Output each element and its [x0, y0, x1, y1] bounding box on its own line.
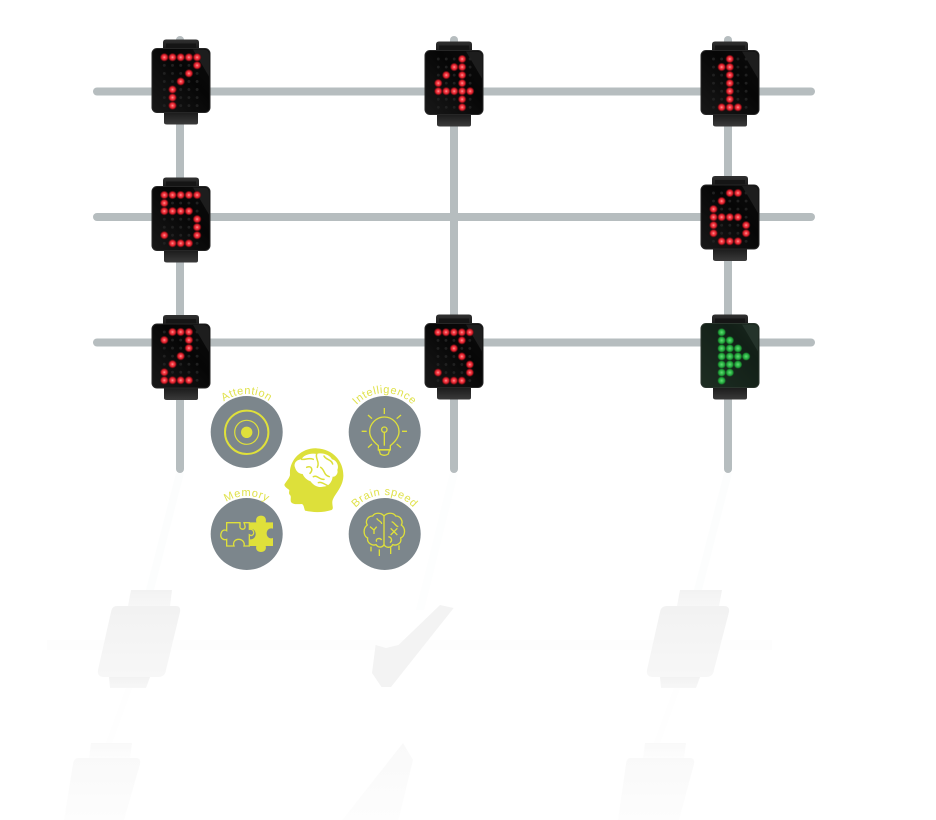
reflection: right upper watch [647, 590, 729, 688]
icon: puzzle pieces [221, 516, 273, 552]
light unit: green arrow [701, 314, 759, 400]
light unit: digit 1 [701, 42, 759, 126]
badge: Memory: Memory [224, 490, 270, 502]
icon: head with brain [284, 448, 343, 512]
reflection: left lower watch [64, 743, 140, 820]
cluster of cognitive skills [210, 385, 421, 570]
reflection: middle upper watch fragment [372, 605, 454, 687]
light unit: digit 6 [701, 176, 759, 261]
light unit: digit 3 [425, 314, 483, 400]
badge: Memory [210, 490, 283, 570]
reflection: middle lower watch fragment [342, 743, 413, 820]
icon: target [225, 411, 268, 454]
light unit: digit 7 [152, 40, 210, 124]
reflection: right lower watch [618, 743, 694, 820]
badge: Attention: Attention [222, 387, 271, 402]
light unit: digit 4 [425, 42, 483, 126]
light unit: digit 2 [152, 315, 210, 400]
reflection: left upper watch [98, 590, 180, 688]
icon: brain outline [364, 513, 405, 556]
light unit: digit 5 [152, 178, 210, 262]
icon: light bulb [362, 408, 407, 455]
badge: Brain speed [348, 489, 421, 570]
grid of grey poles [97, 40, 811, 469]
badge: Intelligence [348, 385, 421, 468]
badge: Intelligence: Intelligence [352, 385, 415, 404]
badge: Brain speed: Brain speed [351, 489, 418, 508]
faint reflection of the light grid [47, 473, 772, 820]
badge: Attention [210, 387, 283, 468]
